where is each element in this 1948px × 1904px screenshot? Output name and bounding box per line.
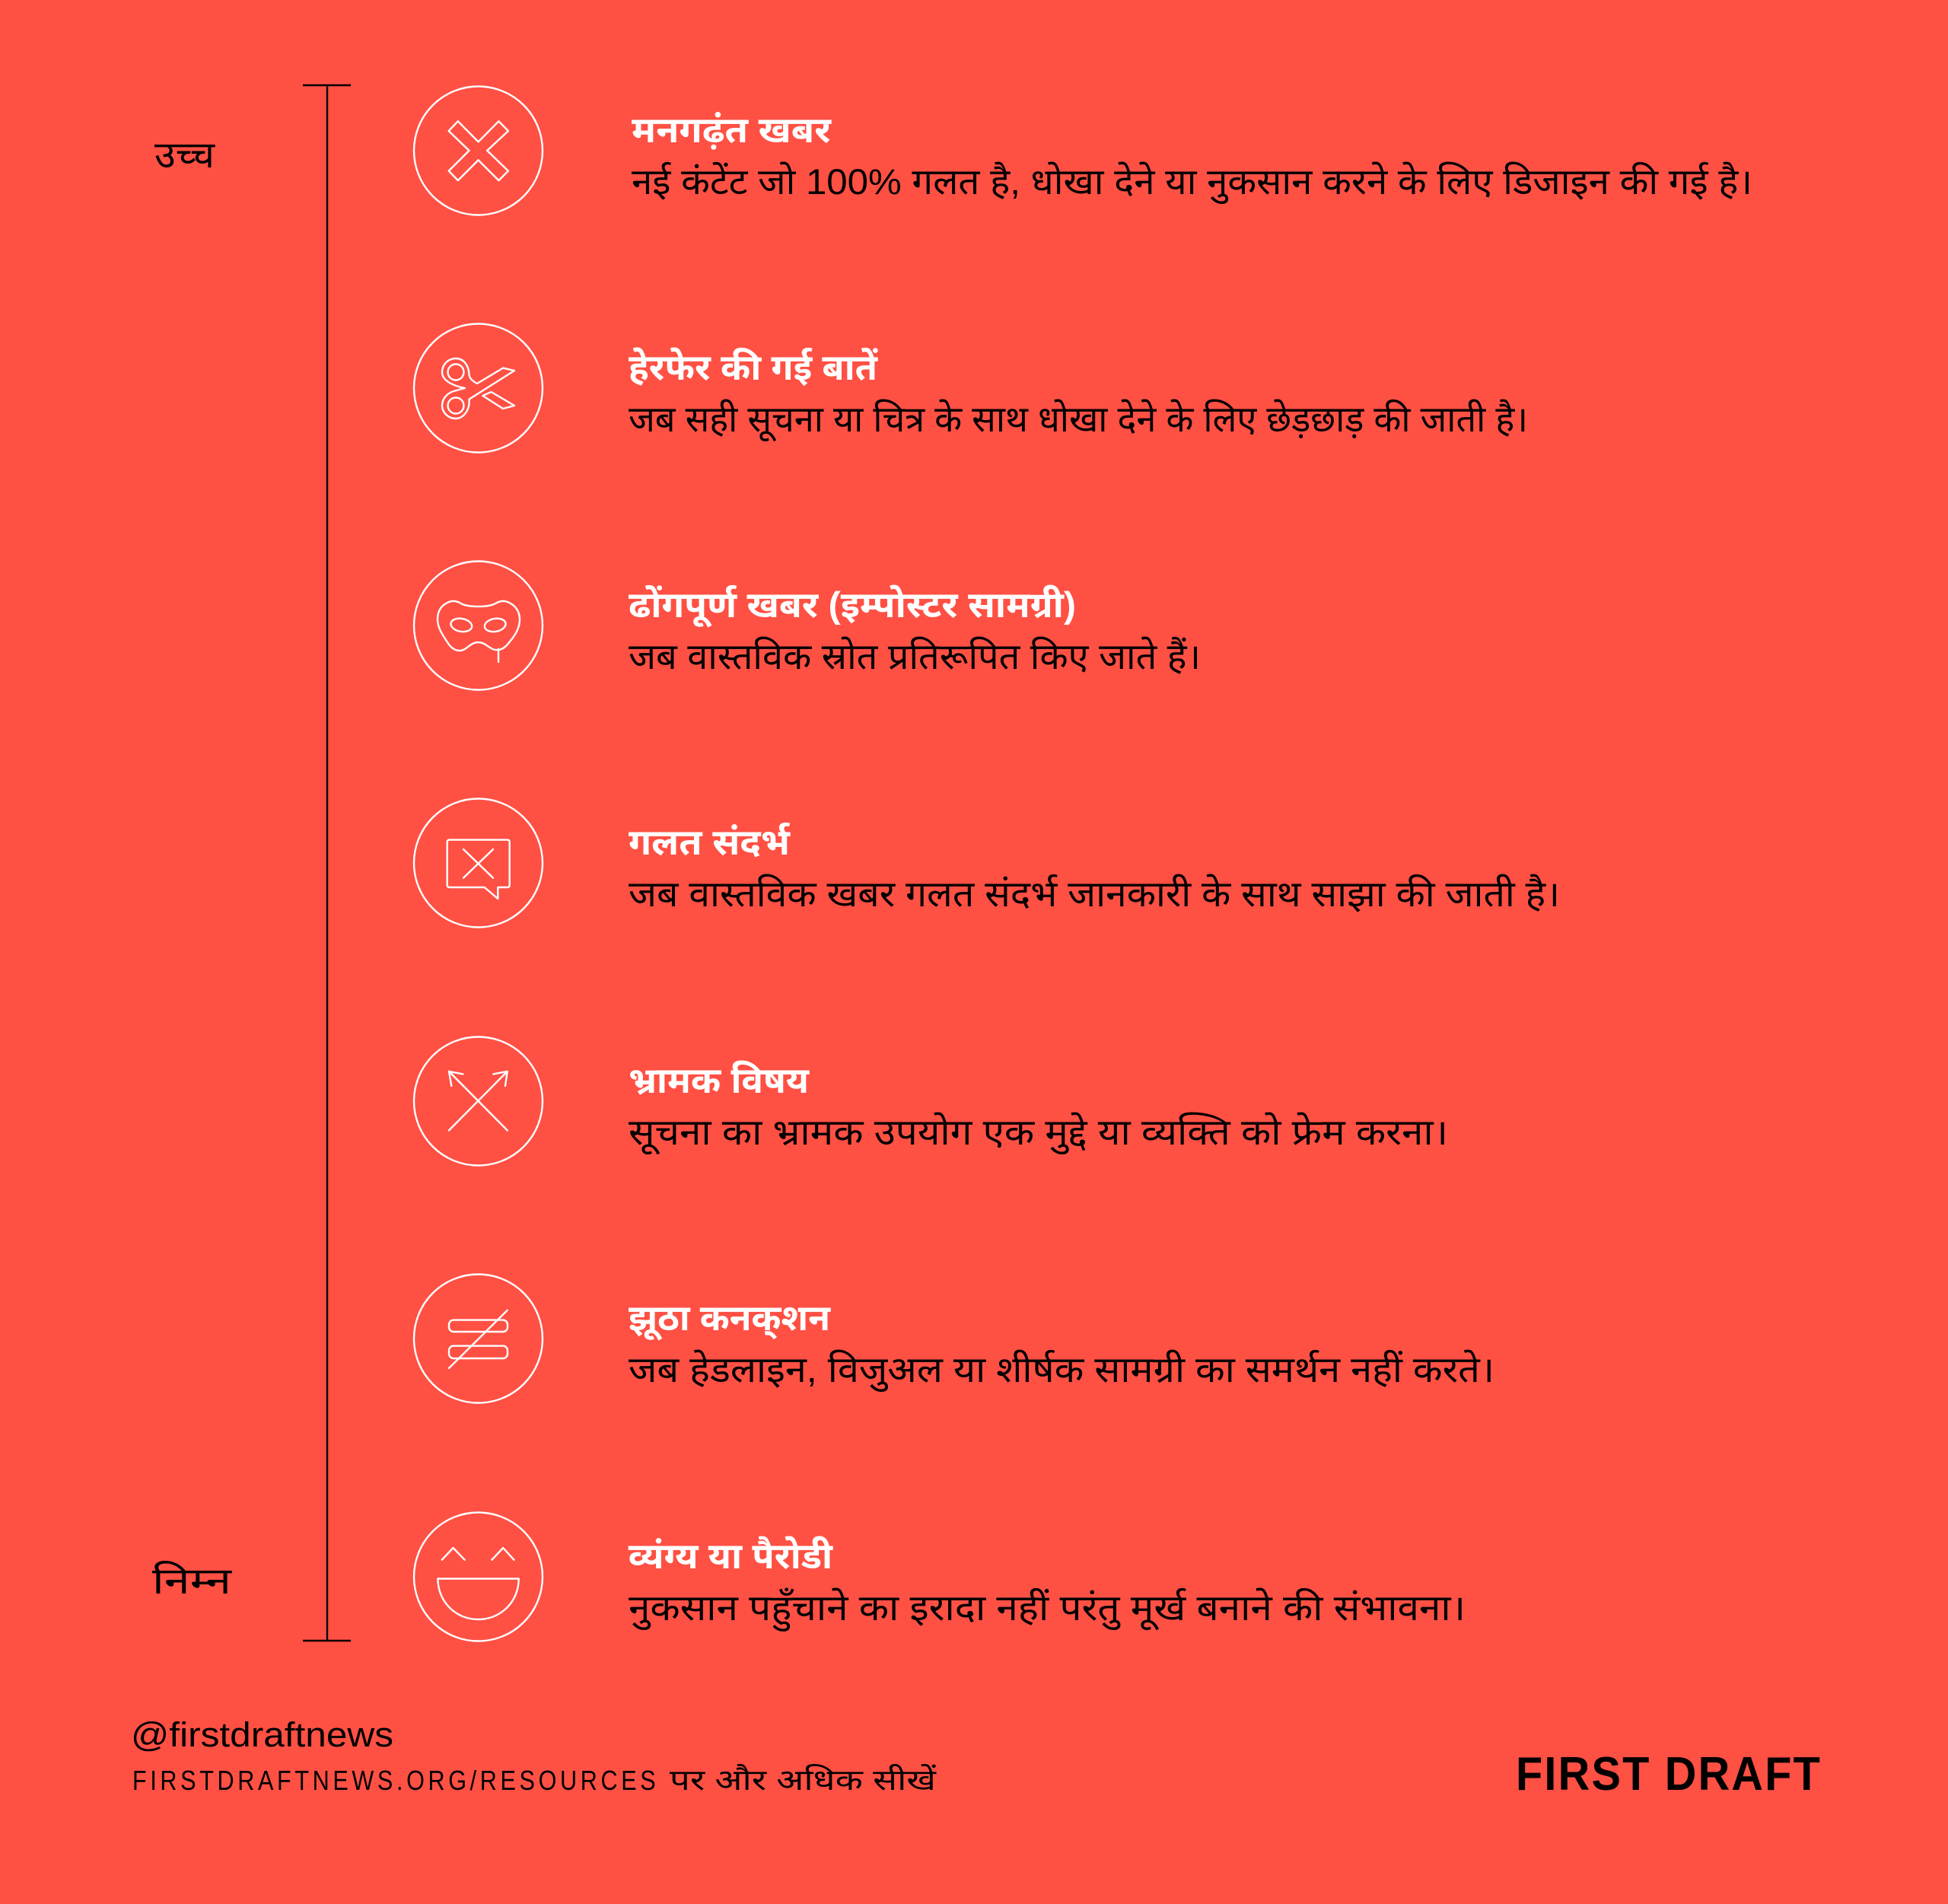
row 3: imposter content [414, 562, 1201, 689]
footer handle: @firstdraftnews [131, 1715, 393, 1754]
description: false context: जब वास्तविक खबर गलत संदर्भ जानकारी के साथ साझा की जाती है। [629, 874, 1560, 914]
severity scale line [303, 85, 351, 1641]
scale label: high: उच्च [154, 135, 216, 176]
heading: false context: गलत संदर्भ [629, 822, 791, 862]
logo: First Draft: FIRST DRAFT [1516, 1747, 1820, 1800]
heading: satire or parody: व्यंग्य या पैरोडी [628, 1536, 833, 1576]
row 6: false connection [414, 1274, 1494, 1403]
heading: false connection: झूठा कनक्‌शन [629, 1297, 831, 1341]
icon: cross [414, 87, 543, 215]
footer link: FIRSTDRAFTNEWS.ORG/RESOURCES [132, 1766, 656, 1797]
heading: misleading content: भ्रामक विषय [629, 1060, 810, 1100]
description: misleading content: सूचना का भ्रामक उपयोग एक मुद्दे या व्यक्ति को फ्रेम करना। [629, 1112, 1448, 1155]
icon: not equal [414, 1274, 543, 1403]
heading: manipulated content: हेरफेर की गई बातें [629, 347, 878, 387]
icon: scissors [414, 324, 543, 452]
icon: mask [414, 562, 543, 689]
row 4: false context [414, 799, 1560, 927]
footer link [132, 1763, 937, 1797]
icon: speech bubble with cross [414, 799, 543, 927]
row 2: manipulated content [414, 324, 1528, 452]
description: fabricated content: नई कंटेंट जो 100% गलत है, धोखा देने या नुकसान करने के लिए डिजाइन की गई है। [632, 161, 1752, 205]
heading: imposter content: ढोंगपूर्ण खबर (इम्पोस्टर सामग्री) [629, 584, 1076, 628]
footer link: पर और अधिक सीखें [670, 1763, 937, 1797]
row 5: misleading content [414, 1036, 1448, 1166]
icon: laughing face [414, 1513, 543, 1641]
description: imposter content: जब वास्तविक स्रोत प्रतिरूपित किए जाते हैं। [629, 636, 1201, 677]
description: false connection: जब हेडलाइन, विजुअल या शीर्षक सामग्री का समर्थन नहीं करते। [629, 1349, 1494, 1393]
icon: crossed arrows [414, 1036, 543, 1166]
row 7: satire or parody [414, 1513, 1466, 1641]
heading: fabricated content: मनगढ़ंत खबर [632, 110, 832, 150]
description: satire or parody: नुकसान पहुँचाने का इरादा नहीं परंतु मूर्ख बनाने की संभावना। [629, 1587, 1466, 1632]
row 1: fabricated content [414, 87, 1752, 215]
description: manipulated content: जब सही सूचना या चित्र के साथ धोखा देने के लिए छेड़छाड़ की जाती है। [629, 399, 1528, 442]
scale label: low: निम्न [152, 1561, 233, 1602]
